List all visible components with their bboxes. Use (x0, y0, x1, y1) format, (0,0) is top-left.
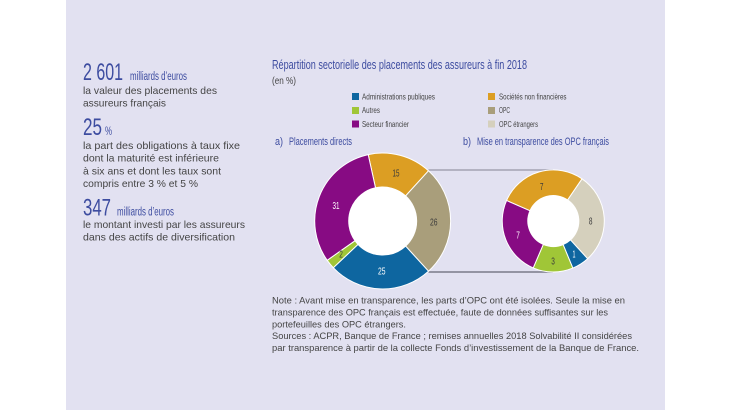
value labels b (516, 181, 593, 268)
value labels a: 2 (339, 248, 343, 260)
key figure: 2 601 (83, 59, 217, 110)
unit label: (en %) (272, 75, 296, 87)
key figure: 25 %: la part des obligations à taux fixe (83, 140, 240, 152)
slice: Autres 3 (533, 244, 573, 272)
legend: Secteur financier (362, 119, 409, 129)
key figure: 347: milliards d’euros (117, 207, 174, 219)
slice: OPC étrangers 8 (568, 179, 604, 259)
value labels a: 31 (332, 200, 340, 212)
value labels b: 1 (572, 248, 576, 260)
legend: Administrations publiques (362, 92, 435, 102)
key figure: 347: 347 (83, 195, 111, 222)
note and sources: Sources : ACPR, Banque de France ; remises annuelles 2018 Solvabilité II considérées (272, 331, 632, 342)
slice: Sociétés non financières 7 (507, 170, 582, 211)
key figure: 25 %: 25 (83, 114, 102, 141)
note and sources: par transparence à partir de la collecte Fonds d’investissement de la Banque de France. (272, 343, 639, 354)
key figure: 25 %: % (105, 126, 112, 138)
chart heading b: Mise en transparence des OPC français (477, 136, 609, 148)
value labels a: 15 (392, 168, 400, 180)
chart heading a: a) (275, 136, 283, 148)
key figure: 25 % (83, 114, 240, 190)
slice: Administrations publiques 25 (333, 244, 428, 289)
note and sources: portefeuilles des OPC étrangers. (272, 320, 406, 330)
key figure: 25 %: compris entre 3 % et 5 % (83, 178, 198, 190)
value labels b: 8 (589, 216, 593, 228)
value labels b: 7 (516, 230, 520, 242)
note and sources: Note : Avant mise en transparence, les parts d’OPC ont été isolées. Seule la mise en (272, 295, 625, 306)
slice: Secteur financier 31 (315, 155, 376, 260)
value labels a: 26 (430, 216, 438, 228)
chart heading b: b) (463, 136, 471, 148)
donut chart a: direct investments (315, 153, 451, 289)
legend: OPC (499, 105, 510, 115)
legend (352, 92, 566, 129)
note and sources (272, 295, 639, 354)
note and sources: transparence des OPC français est effectuée, faute de données suffisantes sur les (272, 308, 608, 318)
value labels b: 3 (551, 256, 555, 268)
legend: Autres (362, 105, 380, 115)
key figure: 2 601: assureurs français (83, 98, 166, 110)
key figure: 2 601: la valeur des placements des (83, 85, 217, 97)
slice: Secteur financier 7 (502, 200, 543, 268)
legend: Sociétés non financières (499, 92, 566, 102)
connector lines between donuts (428, 170, 553, 272)
slice: Administrations publiques 1 (563, 240, 588, 268)
key figures column (83, 59, 245, 244)
value labels a: 25 (378, 266, 386, 278)
slice: OPC 26 (406, 171, 451, 271)
legend: OPC étrangers (499, 119, 538, 129)
value labels a (332, 168, 438, 278)
slice: Autres 2 (327, 241, 358, 268)
chart title: Répartition sectorielle des placements des assureurs à fin 2018 (272, 58, 527, 72)
key figure: 2 601: milliards d’euros (130, 71, 187, 83)
key figure: 25 %: à six ans et dont les taux sont (83, 165, 221, 177)
chart heading b (463, 136, 609, 148)
key figure: 347: le montant investi par les assureurs (83, 219, 245, 231)
key figure: 347 (83, 195, 245, 244)
value labels b: 7 (540, 181, 544, 193)
key figure: 347: dans des actifs de diversification (83, 232, 235, 244)
donut chart b: French funds look-through (502, 170, 604, 272)
chart heading a (275, 136, 352, 148)
chart heading a: Placements directs (289, 136, 352, 148)
key figure: 2 601: 2 601 (83, 59, 123, 86)
key figure: 25 %: dont la maturité est inférieure (83, 153, 219, 165)
slice: Sociétés non financières 15 (368, 153, 428, 196)
